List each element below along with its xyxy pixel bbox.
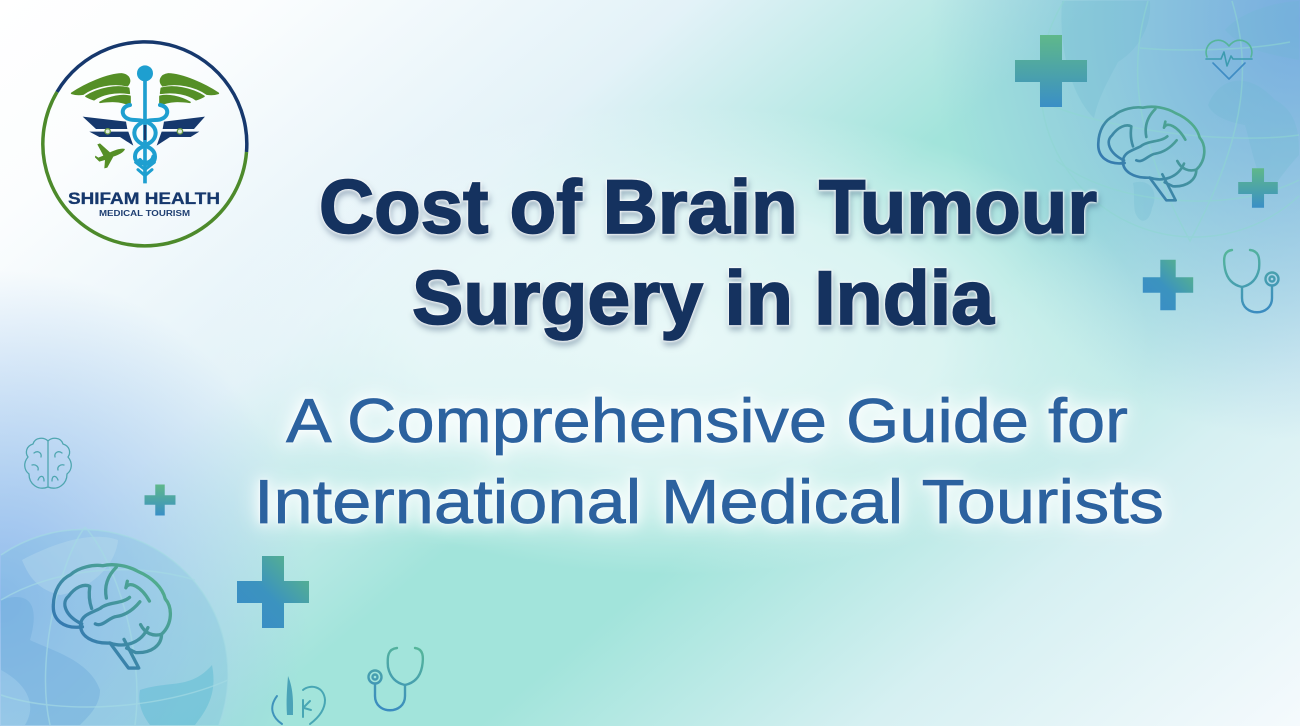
icon: stethoscope right: [1224, 250, 1278, 312]
icon: large cross lower left: [237, 556, 309, 628]
icon: stethoscope bottom: [368, 648, 423, 710]
icon: brain bottom left: [53, 565, 170, 668]
icon: medium cross right: [1238, 168, 1278, 208]
title: Cost of Brain Tumour: [319, 165, 1097, 250]
title: Surgery in India: [412, 256, 995, 341]
icon: heart with pulse: [1206, 40, 1252, 79]
subtitle: A Comprehensive Guide for: [286, 387, 1128, 456]
globe: bottom left: [1, 527, 228, 725]
icon: brain top right: [1098, 107, 1204, 200]
icon: small cross left: [145, 485, 175, 515]
logo: [43, 42, 247, 246]
logo emblem: [72, 65, 218, 183]
subtitle: International Medical Tourists: [254, 468, 1164, 537]
title: [319, 165, 1097, 341]
subtitle: [254, 387, 1164, 537]
logo text: SHIFAM HEALTH: [68, 190, 220, 208]
icon: top-view brain left: [25, 438, 71, 488]
globe: top right: [1040, 1, 1299, 241]
icon: scalpel and heart bottom: [272, 676, 325, 724]
icon: large cross top right: [1015, 35, 1087, 107]
icon: cross lower right: [1143, 260, 1193, 310]
logo: MEDICAL TOURISM: [99, 209, 190, 218]
logo ring: [43, 42, 247, 246]
